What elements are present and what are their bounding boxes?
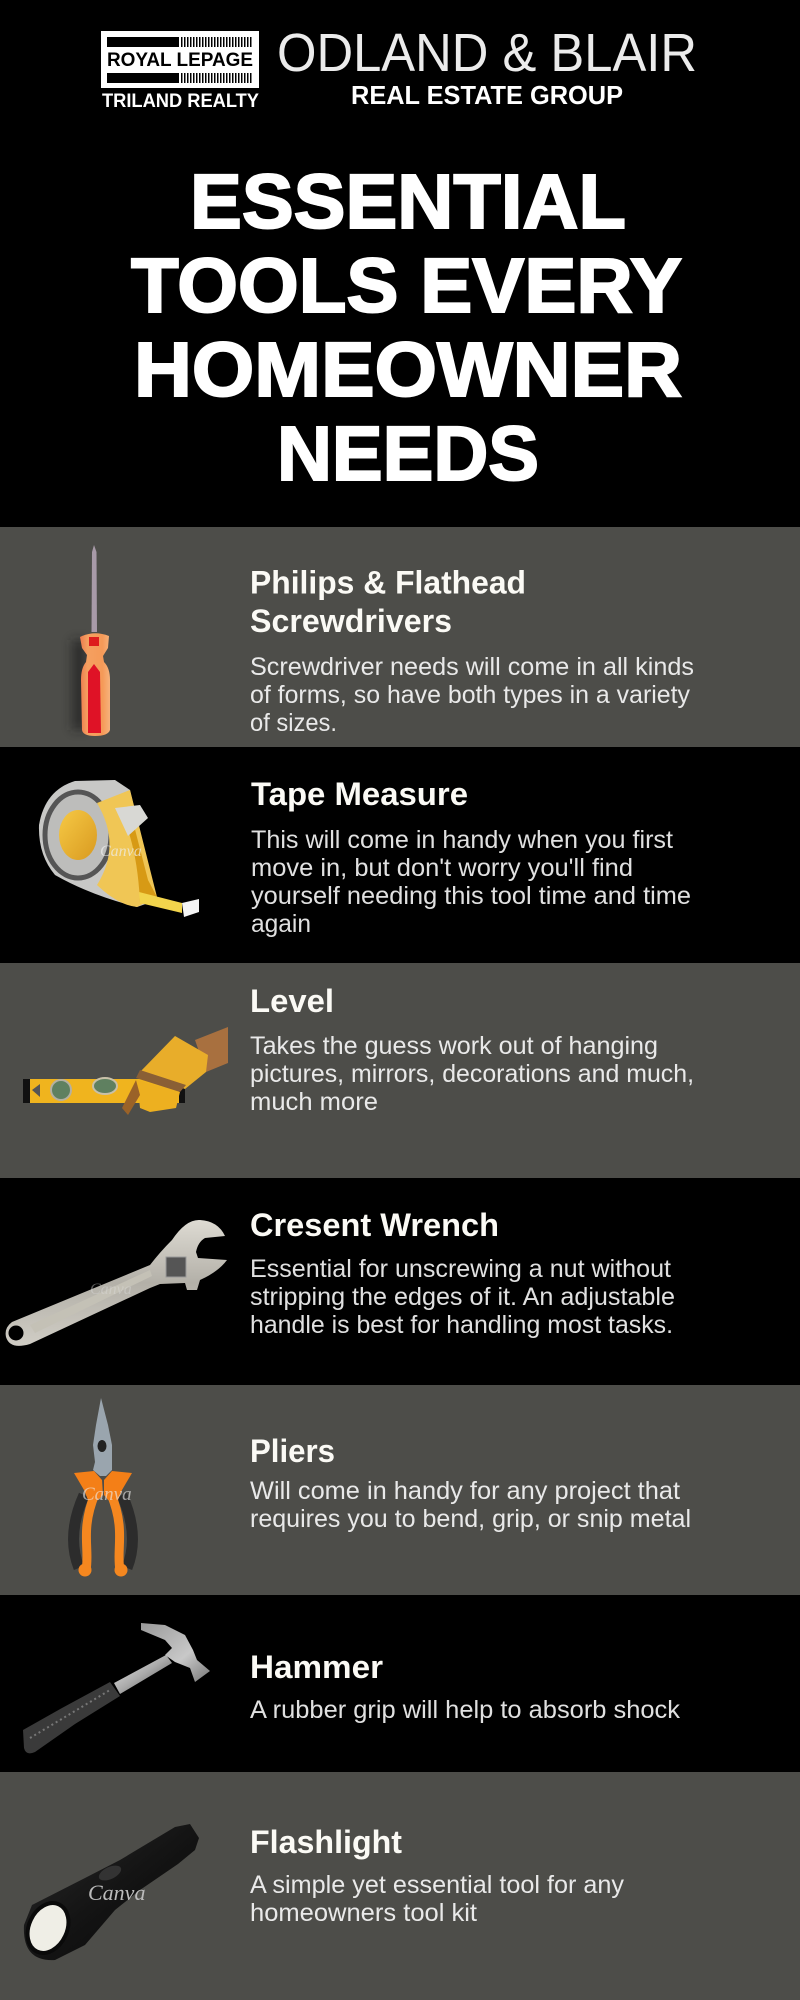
title: TOOLS EVERY bbox=[131, 243, 682, 329]
description: Takes the guess work out of hanging bbox=[250, 1032, 658, 1060]
icon: screwdriver bbox=[72, 545, 110, 736]
icon: tape measure: Canva bbox=[100, 843, 142, 860]
icon: hammer bbox=[23, 1623, 210, 1753]
description: requires you to bend, grip, or snip metal bbox=[250, 1505, 691, 1533]
heading: Pliers bbox=[250, 1433, 335, 1469]
icon: pliers: Canva bbox=[82, 1484, 132, 1505]
logo: Royal LePage Triland Realty: ROYAL LEPAGE bbox=[107, 50, 253, 71]
heading: Cresent Wrench bbox=[250, 1207, 499, 1243]
icon: level and gloved hand bbox=[23, 1027, 228, 1115]
description bbox=[250, 653, 694, 737]
description: again bbox=[251, 910, 311, 938]
description: A rubber grip will help to absorb shock bbox=[250, 1696, 681, 1724]
heading: Flashlight bbox=[250, 1824, 402, 1860]
logo: Odland & Blair Real Estate Group: REAL ESTATE GROUP bbox=[351, 80, 623, 110]
description: much more bbox=[250, 1088, 378, 1116]
description bbox=[250, 1477, 691, 1533]
icon: wrench: Canva bbox=[90, 1281, 132, 1298]
panel: hammer bbox=[0, 1595, 800, 1772]
title: HOMEOWNER bbox=[134, 327, 682, 413]
icon: pliers bbox=[74, 1398, 132, 1576]
description bbox=[250, 1255, 675, 1339]
icon: tape measure bbox=[39, 780, 199, 917]
description: stripping the edges of it. An adjustable bbox=[250, 1283, 675, 1311]
description: move in, but don't worry you'll find bbox=[251, 854, 633, 882]
logo: Royal LePage Triland Realty bbox=[101, 31, 259, 112]
icon: wrench bbox=[6, 1220, 227, 1346]
description: A simple yet essential tool for any bbox=[250, 1871, 624, 1899]
panel: pliers bbox=[0, 1385, 800, 1595]
description: Essential for unscrewing a nut without bbox=[250, 1255, 671, 1283]
description: of sizes. bbox=[250, 709, 337, 737]
description: of forms, so have both types in a variety bbox=[250, 681, 690, 709]
description: pictures, mirrors, decorations and much, bbox=[250, 1060, 694, 1088]
icon: flashlight: Canva bbox=[88, 1880, 145, 1905]
description: Screwdriver needs will come in all kinds bbox=[250, 653, 694, 681]
title: ESSENTIAL bbox=[190, 159, 626, 245]
description: Will come in handy for any project that bbox=[250, 1477, 680, 1505]
panel: level bbox=[0, 963, 800, 1178]
description: This will come in handy when you first bbox=[251, 826, 673, 854]
heading: Hammer bbox=[250, 1649, 383, 1685]
title bbox=[131, 159, 682, 497]
logo: Odland & Blair Real Estate Group: ODLAND & BLAIR bbox=[277, 23, 697, 83]
logo: Royal LePage Triland Realty: TRILAND REALTY bbox=[102, 91, 259, 112]
description bbox=[250, 1871, 624, 1927]
panel: flashlight bbox=[0, 1772, 800, 2000]
panel: crescent wrench bbox=[0, 1178, 800, 1385]
panel: screwdrivers bbox=[0, 527, 800, 747]
description: homeowners tool kit bbox=[250, 1899, 477, 1927]
title: NEEDS bbox=[277, 411, 539, 497]
description: handle is best for handling most tasks. bbox=[250, 1311, 673, 1339]
heading: Philips & Flathead bbox=[250, 564, 526, 600]
heading: Level bbox=[250, 983, 334, 1019]
description bbox=[251, 826, 691, 938]
logo: Odland & Blair Real Estate Group bbox=[277, 23, 697, 110]
heading: Tape Measure bbox=[251, 776, 468, 812]
description bbox=[250, 1032, 694, 1116]
icon: flashlight bbox=[20, 1824, 199, 1960]
description: yourself needing this tool time and time bbox=[251, 882, 691, 910]
panel: tape measure bbox=[0, 747, 800, 963]
heading line 2: Screwdrivers bbox=[250, 603, 452, 639]
